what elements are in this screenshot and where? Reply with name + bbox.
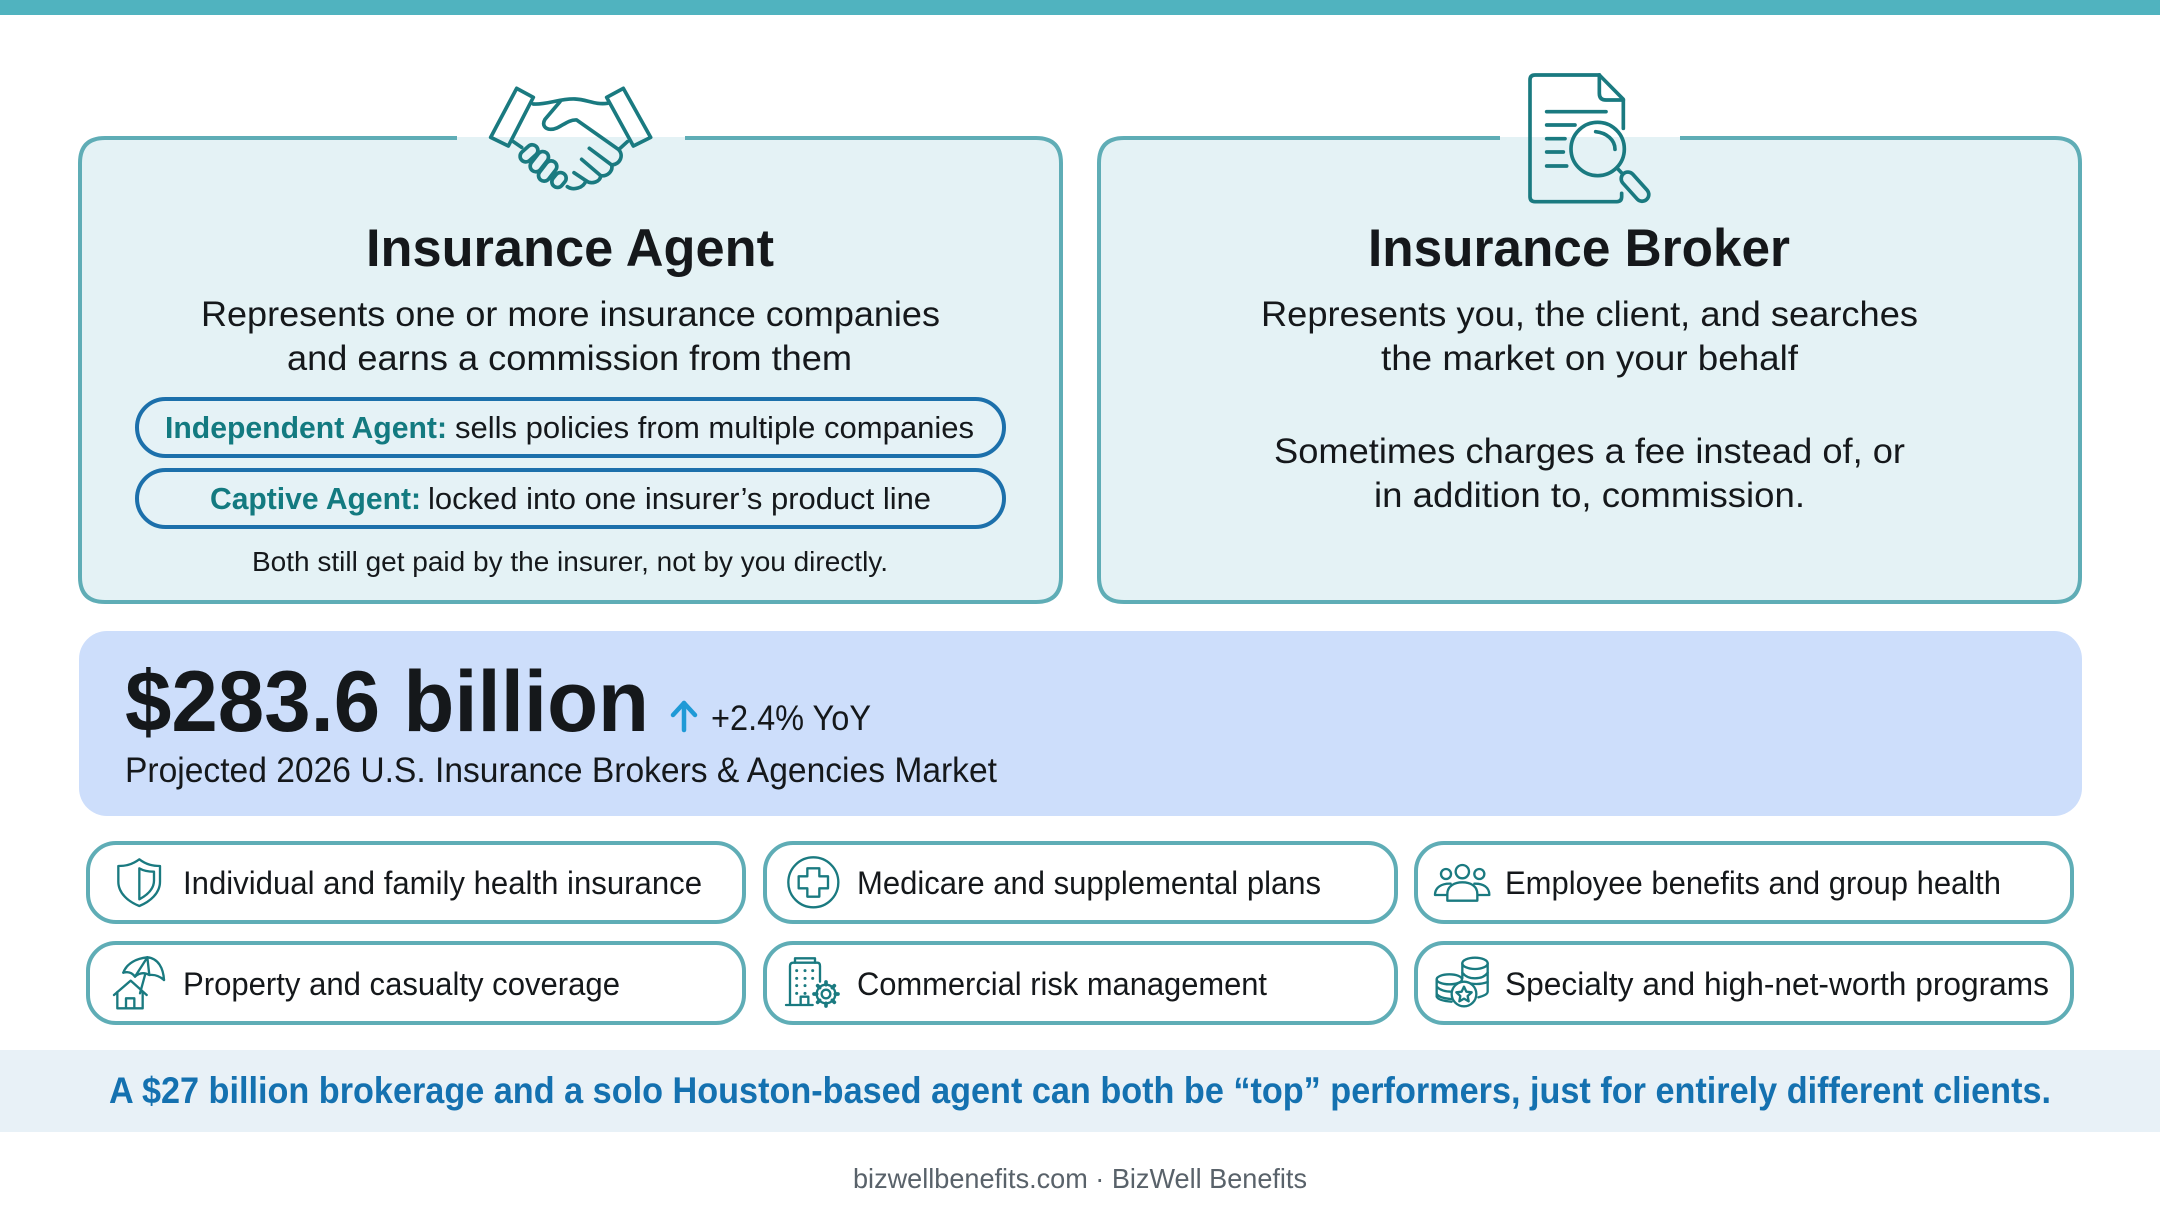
card: individual and family health insurance	[88, 843, 744, 922]
icon: shield	[118, 859, 160, 906]
top accent bar	[0, 0, 2160, 15]
card: medicare and supplemental plans	[765, 843, 1396, 922]
callout band: A $27 billion brokerage and a solo Houston-based agent can both be “top” performers, just for entirely different clients.	[109, 1070, 2051, 1111]
label: Medicare and supplemental plans	[857, 865, 1321, 901]
label: Specialty and high-net-worth programs	[1505, 966, 2049, 1002]
label: Individual and family health insurance	[183, 865, 702, 901]
text: broker description	[1261, 295, 1918, 378]
heading: insurance broker: Insurance Broker	[1368, 219, 1790, 278]
card: employee benefits and group health	[1416, 843, 2072, 922]
icon: people	[1435, 865, 1489, 901]
icon: house with umbrella	[114, 957, 164, 1008]
label: Commercial risk management	[857, 966, 1267, 1002]
icon: coins with star	[1437, 958, 1488, 1006]
pill: independent agent: Independent Agent:	[165, 410, 447, 445]
icon: handshake	[491, 88, 651, 190]
panel: insurance agent	[79, 88, 1062, 603]
text: agent description	[201, 295, 940, 378]
pill: independent agent	[137, 399, 1004, 456]
panel: insurance broker	[1098, 75, 2082, 603]
text: agent description: Represents one or more insurance companies	[201, 295, 940, 334]
icon: building with gear	[786, 958, 838, 1006]
callout band	[0, 1050, 2160, 1132]
big number: $283.6 billion	[125, 654, 649, 750]
card: commercial risk management	[765, 943, 1396, 1023]
text: broker fee note: Sometimes charges a fee instead of, or	[1274, 432, 1905, 471]
pill: captive agent: locked into one insurer’s product line	[428, 481, 931, 516]
text: broker fee note: in addition to, commission.	[1374, 476, 1805, 515]
pill: captive agent: Captive Agent:	[210, 481, 421, 516]
icon: medical cross	[788, 857, 838, 907]
growth rate: +2.4% YoY	[711, 699, 871, 738]
pill: captive agent	[137, 470, 1004, 527]
text: broker description: the market on your behalf	[1381, 339, 1798, 378]
pill: independent agent: sells policies from multiple companies	[455, 410, 974, 445]
label: Property and casualty coverage	[183, 966, 620, 1002]
card: specialty and high-net-worth programs	[1416, 943, 2072, 1023]
icon: up arrow	[673, 703, 695, 730]
text: broker fee note	[1274, 432, 1905, 515]
label: Employee benefits and group health	[1505, 865, 2001, 901]
footer source: bizwellbenefits.com · BizWell Benefits	[853, 1163, 1307, 1194]
heading: insurance agent: Insurance Agent	[366, 219, 774, 278]
text: agent description: and earns a commission from them	[287, 339, 852, 378]
text: broker description: Represents you, the client, and searches	[1261, 295, 1918, 334]
note: both paid by insurer: Both still get paid by the insurer, not by you directly.	[252, 546, 888, 577]
icon: document with magnifier	[1530, 75, 1652, 204]
panel: market size stat	[79, 631, 2082, 816]
card: property and casualty coverage	[88, 943, 744, 1023]
market caption: Projected 2026 U.S. Insurance Brokers & Agencies Market	[125, 751, 997, 790]
